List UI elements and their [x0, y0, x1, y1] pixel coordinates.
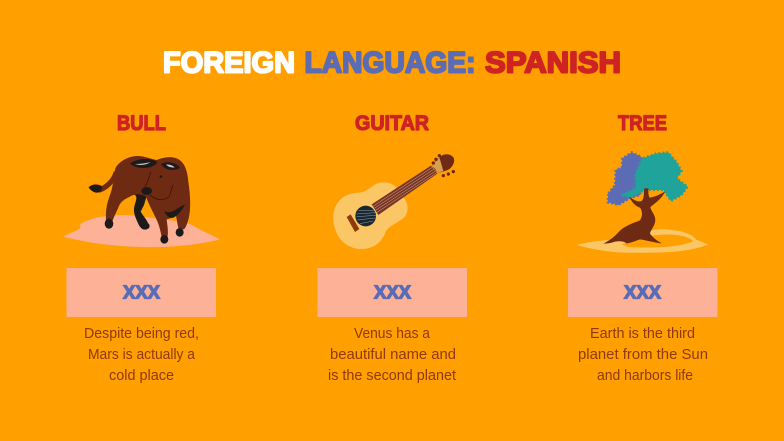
description: tree: planet from the Sun — [578, 347, 708, 363]
description: guitar: beautiful name and — [330, 347, 456, 363]
panel: bull — [63, 112, 220, 384]
icon: tree — [577, 152, 708, 253]
description: guitar — [328, 326, 456, 384]
description: guitar: is the second planet — [328, 368, 456, 384]
heading: guitar: GUITAR — [355, 112, 429, 135]
description: bull: Despite being red, — [84, 326, 199, 342]
description: bull: cold place — [109, 368, 174, 384]
description: tree — [578, 326, 708, 384]
panel: tree — [568, 112, 718, 384]
heading: tree: TREE — [618, 112, 667, 135]
label box: guitar — [318, 268, 467, 317]
description: bull: Mars is actually a — [88, 347, 196, 363]
title: FOREIGN — [163, 46, 295, 80]
description: tree: Earth is the third — [590, 326, 695, 342]
description: guitar: Venus has a — [354, 326, 431, 342]
title — [163, 46, 621, 80]
heading: bull: BULL — [117, 112, 166, 135]
label box: guitar: XXX — [374, 282, 411, 302]
icon: bull — [63, 156, 220, 247]
label box: tree — [568, 268, 718, 317]
description: tree: and harbors life — [597, 368, 693, 384]
title: LANGUAGE: — [304, 46, 476, 80]
icon: guitar — [333, 154, 455, 249]
label box: bull: XXX — [123, 282, 160, 302]
label box: tree: XXX — [624, 282, 661, 302]
label box: bull — [66, 268, 216, 317]
description: bull — [84, 326, 199, 384]
panel: guitar — [318, 112, 467, 384]
title: SPANISH — [485, 46, 621, 80]
